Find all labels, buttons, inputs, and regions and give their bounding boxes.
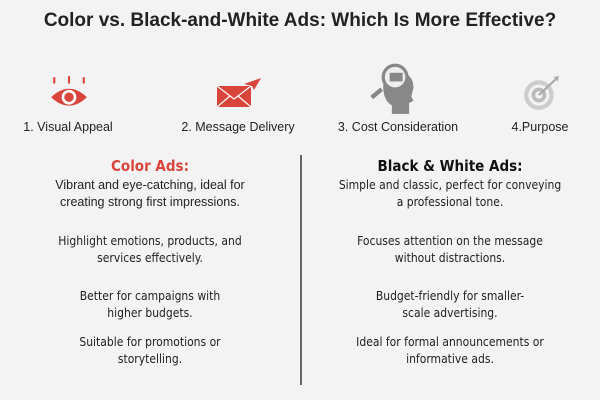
- panel: color ads: [55, 157, 245, 366]
- text block: Suitable for promotions or: [79, 335, 221, 349]
- heading: color ads: Color Ads:: [111, 157, 189, 175]
- text block: [339, 178, 561, 209]
- text block: [357, 234, 543, 265]
- text block: [79, 335, 221, 366]
- text: 4.Purpose: [512, 120, 568, 134]
- text block: Focuses attention on the message: [357, 234, 543, 248]
- text block: [58, 234, 242, 265]
- labels: 1. Visual Appeal: [23, 120, 113, 134]
- text block: a professional tone.: [397, 195, 503, 209]
- text block: Simple and classic, perfect for conveying: [339, 178, 561, 192]
- text block: services effectively.: [97, 251, 203, 265]
- text block: higher budgets.: [107, 306, 193, 320]
- icon: head with magnifier: [370, 64, 414, 114]
- text block: Better for campaigns with: [80, 289, 220, 303]
- text block: [80, 289, 220, 320]
- text: 2. Message Delivery: [181, 120, 295, 134]
- icon: target: [524, 76, 559, 110]
- text block: Ideal for formal announcements or: [356, 335, 544, 349]
- text block: [376, 289, 524, 320]
- text block: Budget-friendly for smaller-: [376, 289, 524, 303]
- text block: storytelling.: [118, 352, 182, 366]
- text block: creating strong first impressions.: [60, 195, 240, 209]
- divider: [300, 155, 302, 385]
- text block: Vibrant and eye-catching, ideal for: [55, 178, 245, 192]
- text block: [55, 178, 245, 209]
- text block: scale advertising.: [402, 306, 498, 320]
- heading: bw ads: Black & White Ads:: [377, 157, 523, 175]
- text block: Highlight emotions, products, and: [58, 234, 242, 248]
- icon: envelope: [217, 78, 261, 107]
- panel: black and white ads: [339, 157, 561, 366]
- icon: eye: [51, 76, 87, 106]
- title: Color vs. Black-and-White Ads: Which Is More Effective?: [44, 10, 556, 31]
- text: 3. Cost Consideration: [338, 120, 458, 134]
- text block: [356, 335, 544, 366]
- text block: without distractions.: [395, 251, 505, 265]
- text block: informative ads.: [406, 352, 494, 366]
